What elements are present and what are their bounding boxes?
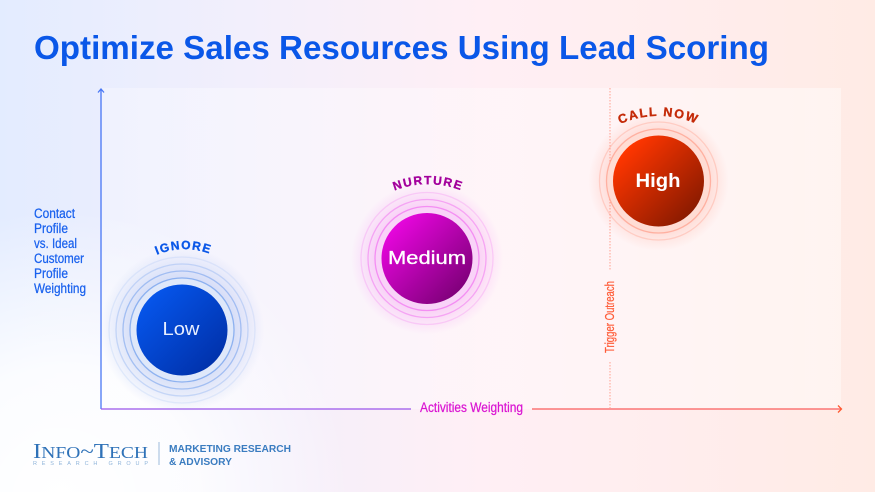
label: Medium: Medium	[388, 248, 466, 268]
panel: chart area	[102, 88, 841, 409]
logo: Info-Tech Research Group: & ADVISORY	[169, 456, 232, 468]
medium score node	[357, 176, 498, 328]
y-axis label	[34, 206, 86, 296]
title: Optimize Sales Resources Using Lead Scoring	[34, 29, 769, 66]
low score node	[108, 240, 256, 404]
y-axis label: Customer	[34, 251, 84, 266]
y-axis label: Profile	[34, 221, 68, 236]
y-axis label: Profile	[34, 266, 68, 281]
x-axis arrow	[101, 406, 842, 412]
high score node	[594, 107, 723, 246]
x-axis label: Activities Weighting	[420, 400, 523, 415]
logo: Info-Tech Research Group: RESEARCH GROUP	[33, 461, 148, 467]
y-axis arrow	[98, 89, 104, 409]
label: Call now: CALL NOW	[618, 107, 699, 123]
y-axis label: vs. Ideal	[34, 236, 77, 251]
trigger outreach line: Trigger Outreach	[603, 281, 617, 353]
label: Low: Low	[162, 319, 201, 339]
y-axis label: Contact	[34, 206, 75, 221]
label: High: High	[636, 171, 680, 192]
logo: Info-Tech Research Group: INFO ~T ECH	[33, 439, 148, 463]
label: Ignore: IGNORE	[154, 240, 212, 255]
label: Nurture: NURTURE	[392, 176, 462, 190]
logo: Info-Tech Research Group: MARKETING RESEARCH	[169, 443, 291, 455]
logo: Info-Tech Research Group	[33, 439, 291, 468]
y-axis label: Weighting	[34, 281, 86, 296]
